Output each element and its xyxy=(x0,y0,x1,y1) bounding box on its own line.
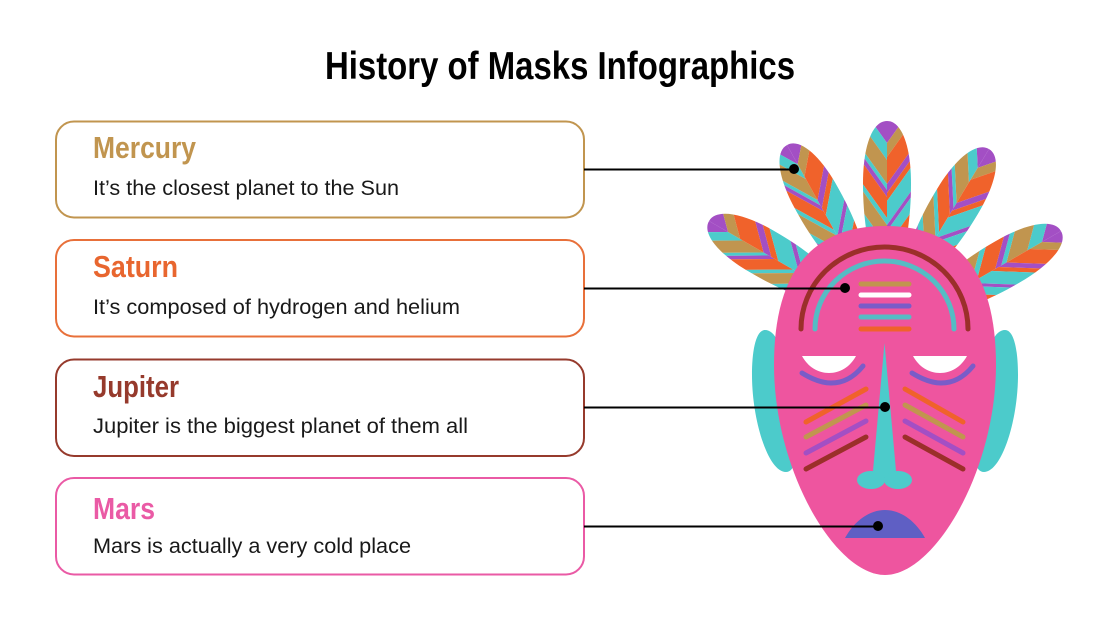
forehead lines xyxy=(861,284,909,329)
panel: Saturn xyxy=(56,240,584,336)
feathers xyxy=(707,121,1063,300)
panel: Jupiter xyxy=(56,360,584,456)
heading: Mars: Mars xyxy=(93,491,155,526)
mouth xyxy=(845,510,925,538)
panel: Mars xyxy=(56,478,584,574)
right ear xyxy=(972,330,1018,472)
heading: Jupiter: Jupiter xyxy=(93,369,179,404)
heading: Saturn: Saturn xyxy=(93,249,178,284)
panel: Mercury xyxy=(56,122,584,218)
face xyxy=(774,226,996,575)
connector: Jupiter xyxy=(584,402,890,412)
eyes xyxy=(802,356,973,383)
text: Jupiter description: Jupiter is the biggest planet of them all xyxy=(93,415,468,438)
text: Mercury description: It’s the closest planet to the Sun xyxy=(93,177,399,200)
connector: Mercury xyxy=(584,164,799,174)
left ear xyxy=(752,330,798,472)
title: History of Masks Infographics xyxy=(325,45,795,88)
icon: tribal mask xyxy=(707,121,1063,575)
connector: Saturn xyxy=(584,283,850,293)
forehead arcs xyxy=(801,247,968,329)
text: Saturn description: It’s composed of hydrogen and helium xyxy=(93,296,460,319)
text: Mars description: Mars is actually a very cold place xyxy=(93,535,411,558)
nose xyxy=(857,343,912,489)
connector: Mars xyxy=(584,521,883,531)
cheek stripes xyxy=(806,389,963,469)
heading: Mercury: Mercury xyxy=(93,130,197,165)
